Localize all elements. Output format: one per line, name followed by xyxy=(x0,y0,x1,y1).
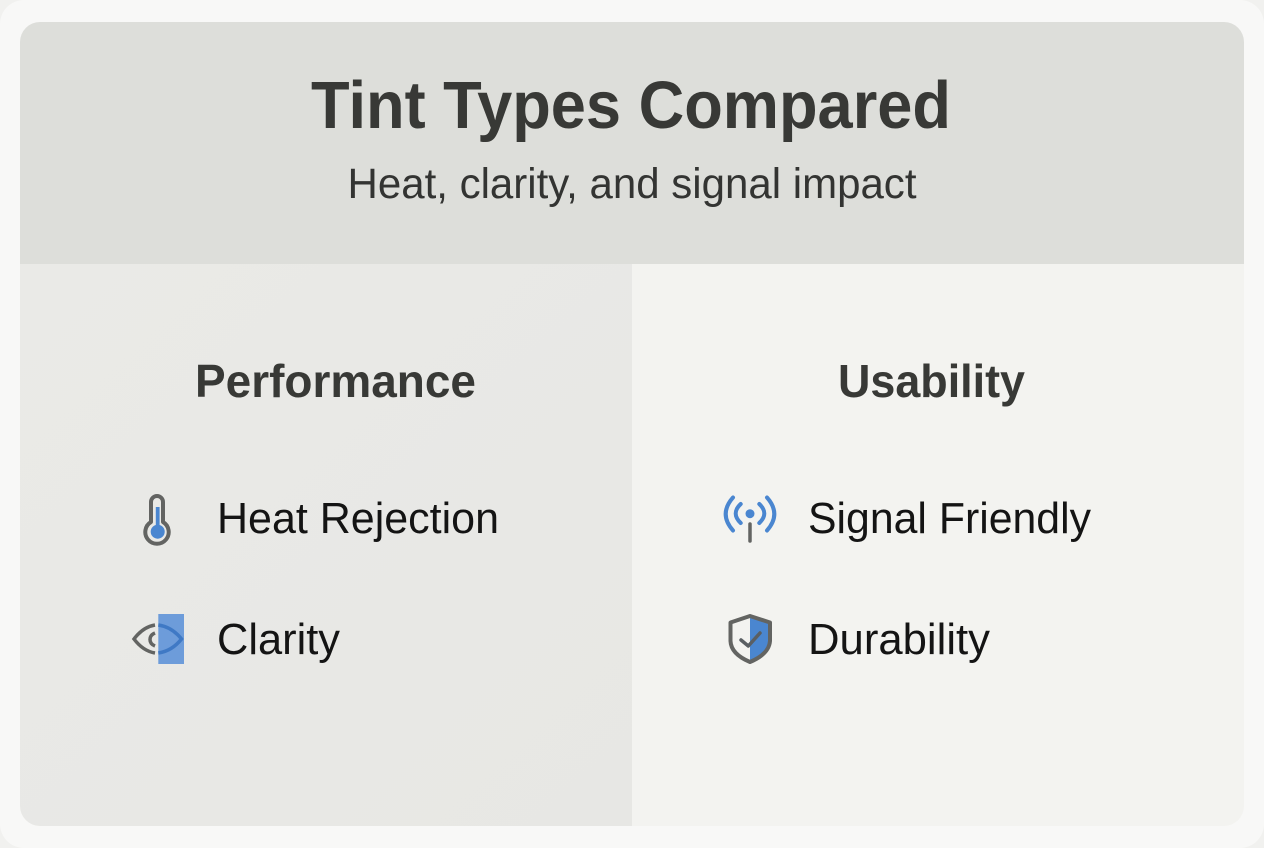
panel: usability background xyxy=(632,264,1244,826)
panel: performance xyxy=(134,355,499,664)
subtitle: Heat, clarity, and signal impact xyxy=(348,160,917,208)
label: clarity: Clarity xyxy=(217,615,340,664)
header band xyxy=(20,22,1244,264)
heading: performance: Performance xyxy=(195,355,476,407)
label: heat rejection: Heat Rejection xyxy=(217,494,499,543)
icon: shield xyxy=(730,616,770,662)
label: durability: Durability xyxy=(808,615,990,664)
title: Tint Types Compared xyxy=(311,68,951,143)
label: signal friendly: Signal Friendly xyxy=(808,494,1091,543)
icon: eye with blue overlay xyxy=(134,614,184,664)
icon: thermometer xyxy=(145,496,169,544)
panel: performance background xyxy=(20,264,632,826)
panel: usability xyxy=(726,355,1091,664)
icon: signal antenna xyxy=(726,498,774,541)
heading: usability: Usability xyxy=(838,355,1025,407)
